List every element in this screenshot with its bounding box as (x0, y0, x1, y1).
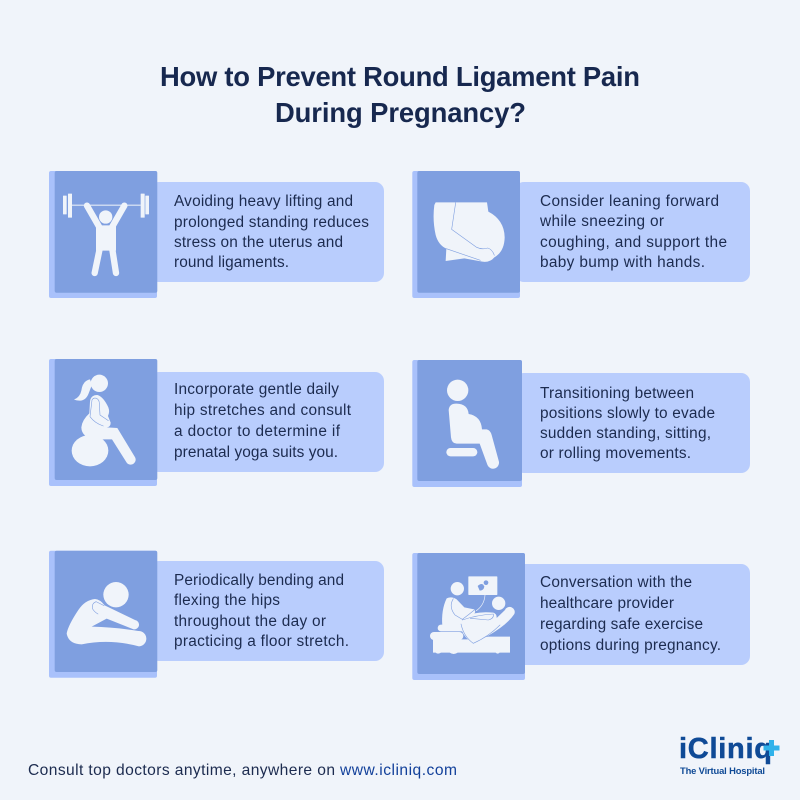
text: hip stretches: prenatal yoga suits you. (174, 444, 338, 461)
text: slow transitions (540, 385, 715, 462)
panel: avoid heavy lifting (49, 171, 384, 298)
text: lean forward: while sneezing or (539, 213, 664, 230)
text: hip stretches: Incorporate gentle daily (174, 381, 339, 398)
icon: seated pregnant woman (446, 380, 499, 469)
text: floor stretch: throughout the day or (174, 613, 326, 630)
text: lean forward: coughing, and support the (540, 234, 727, 251)
logo: iCliniq: The Virtual Hospital (680, 765, 765, 776)
text: talk to provider (540, 574, 721, 654)
text: avoid heavy lifting (174, 193, 369, 271)
text: avoid heavy lifting: prolonged standing reduces (174, 214, 369, 231)
text: hip stretches: a doctor to determine if (174, 423, 341, 440)
logo: iCliniq (679, 733, 780, 776)
panel: hip stretches (49, 359, 384, 486)
text: lean forward: baby bump with hands. (540, 254, 705, 271)
text: slow transitions: positions slowly to evade (540, 405, 715, 422)
icon: seated forward bend (67, 582, 146, 646)
icon: weightlifter (63, 194, 149, 273)
text: avoid heavy lifting: round ligaments. (174, 254, 289, 271)
text: hip stretches (174, 381, 352, 461)
text: talk to provider: Conversation with the (540, 574, 692, 591)
text: hip stretches: hip stretches and consult (174, 402, 352, 419)
text: lean forward: Consider leaning forward (540, 193, 719, 210)
text: floor stretch: practicing a floor stretch. (174, 633, 349, 650)
text: floor stretch: flexing the hips (174, 592, 280, 609)
text: floor stretch: Periodically bending and (174, 572, 344, 589)
panel: talk to provider (412, 553, 750, 680)
footer text: www.icliniq.com (339, 762, 457, 779)
text: slow transitions: Transitioning between (540, 385, 694, 402)
title: During Pregnancy? (275, 97, 526, 128)
text: lean forward (539, 193, 727, 271)
text: avoid heavy lifting: Avoiding heavy lifting and (174, 193, 353, 210)
text: talk to provider: healthcare provider (540, 595, 674, 612)
panel: floor stretch (49, 551, 384, 678)
text: floor stretch (174, 572, 349, 650)
panel: lean forward (412, 171, 750, 298)
text: avoid heavy lifting: stress on the uterus and (174, 234, 343, 251)
footer text: Consult top doctors anytime, anywhere on (28, 762, 335, 779)
text: slow transitions: or rolling movements. (540, 445, 691, 462)
icon: supporting baby bump (434, 202, 505, 262)
icon: woman on exercise ball (72, 375, 136, 466)
panel: slow transitions (412, 360, 750, 487)
text: slow transitions: sudden standing, sitting, (540, 425, 711, 442)
logo: iCliniq: iCliniq (679, 733, 772, 765)
title (160, 61, 640, 128)
text: talk to provider: regarding safe exercise (540, 616, 703, 633)
title: How to Prevent Round Ligament Pain (160, 61, 640, 92)
icon: ultrasound consultation (430, 576, 515, 654)
text: talk to provider: options during pregnancy. (540, 637, 721, 654)
